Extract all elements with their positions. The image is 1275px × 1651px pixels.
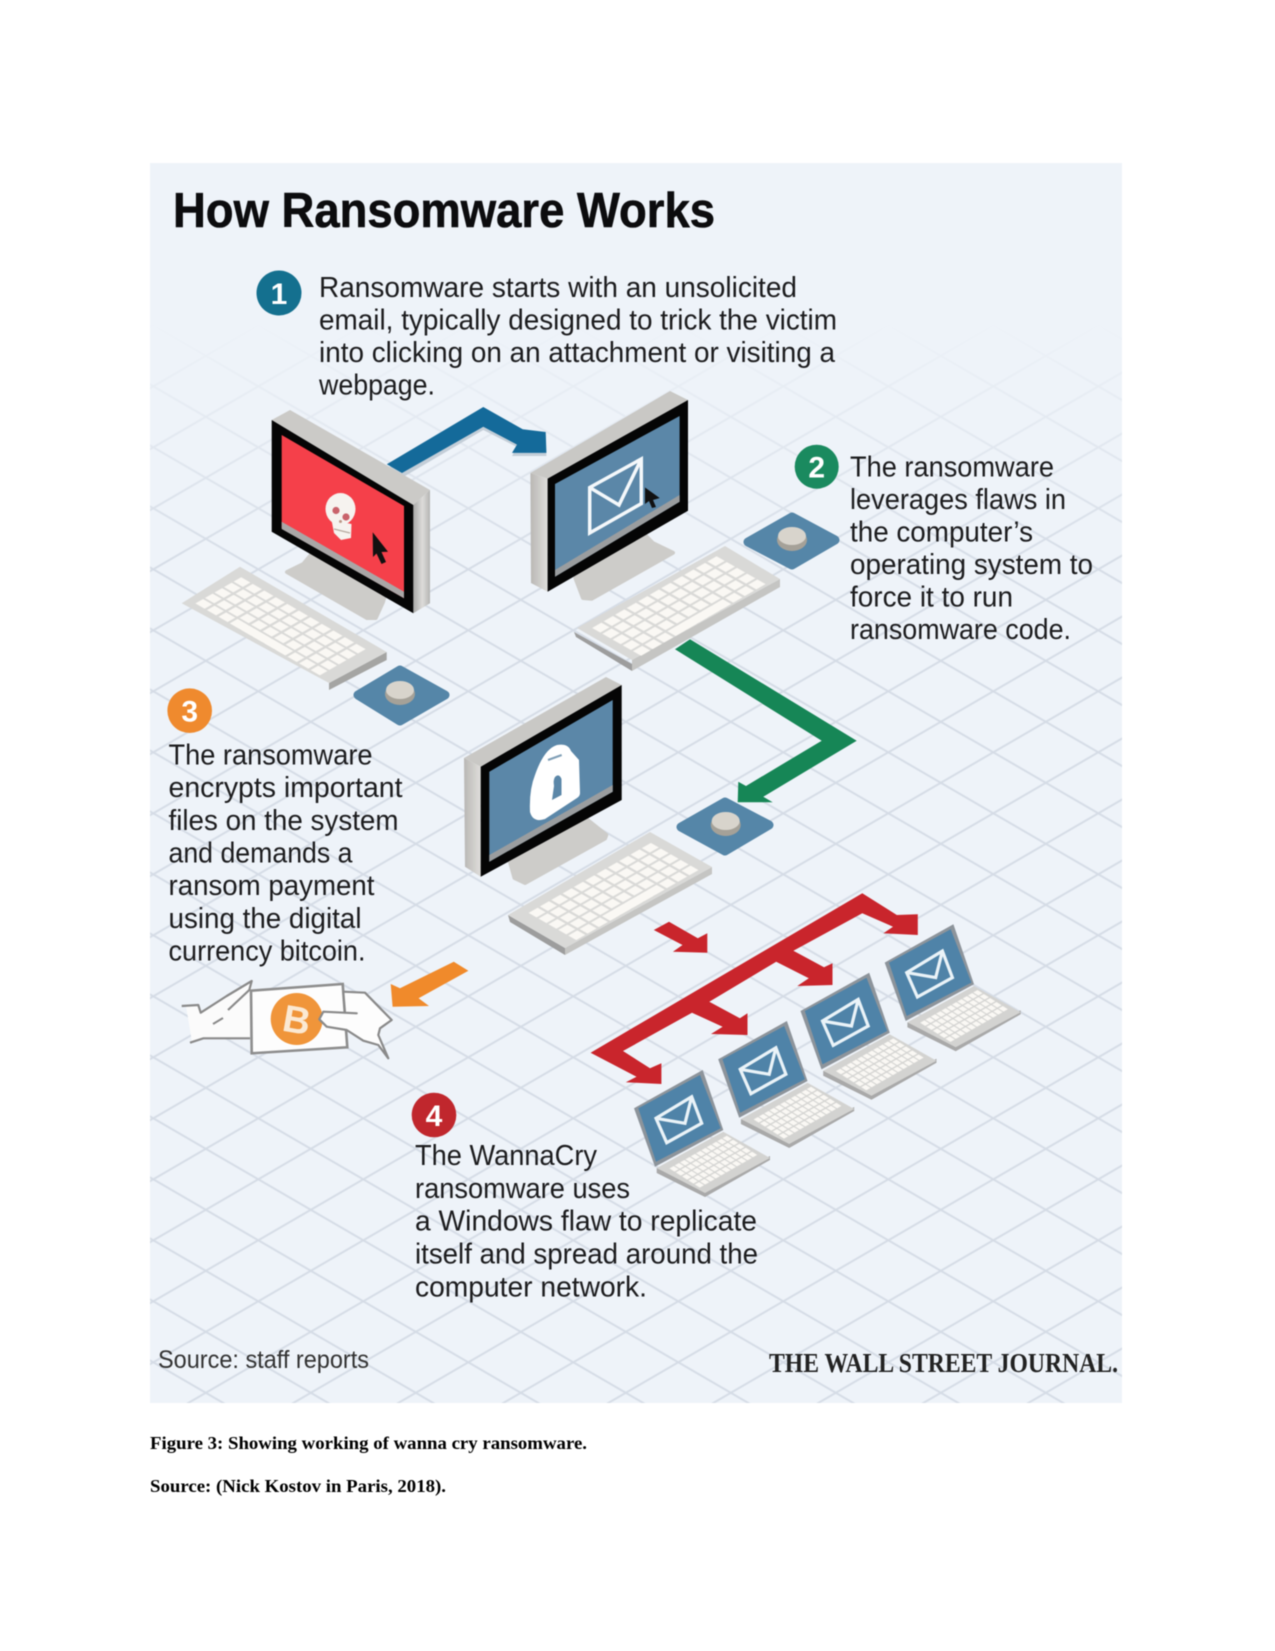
mouse pad 3 [681,802,769,851]
right hand [319,992,392,1058]
step 1 badge: 1 [271,278,287,311]
laptop 3 [800,973,936,1100]
step 1 text: webpage. [318,370,435,402]
keyboard 1 [182,567,387,690]
step 3 text: ransom payment [168,870,374,902]
step 2 text: operating system to [850,549,1093,581]
step 1 text: email, typically designed to trick the victim [319,304,837,336]
step 3 text [168,740,402,968]
arrow: orange toward bitcoin payment [391,962,468,1007]
source note: Source: staff reports [158,1346,369,1374]
step 2 text: the computer’s [850,516,1033,548]
step 2 text: leverages flaws in [850,484,1066,516]
step 2 badge [795,445,839,489]
step 3 text: files on the system [168,805,398,837]
step 1 text [318,272,837,402]
icon: hands exchanging bitcoin note [182,981,392,1058]
step 2 badge: 2 [808,452,825,484]
arrow: red branching to laptops [591,893,918,1084]
step 3 text: encrypts important [168,772,402,804]
mouse pad 1 [358,670,445,721]
step 3 badge [167,688,212,733]
step 3 text: currency bitcoin. [168,936,366,968]
monitor 2: envelope screen [530,391,688,599]
arrow: green from keyboard 2 to mouse pad 3 [675,639,857,802]
keyboard 3 [508,832,712,955]
figure caption: Figure 3: Showing working of wanna cry ransomware. [150,1433,587,1453]
panel: background with isometric grid [150,163,1122,1403]
step 4 text: ransomware uses [415,1173,630,1205]
publisher credit: THE WALL STREET JOURNAL. [769,1348,1118,1378]
step 2 text: force it to run [850,582,1013,614]
title: How Ransomware Works [173,184,715,238]
step 4 badge: 4 [426,1100,443,1133]
step 3 badge: 3 [181,696,198,728]
step 3 text: and demands a [168,838,353,870]
step 2 text: The ransomware [850,452,1054,484]
step 2 text: ransomware code. [850,614,1071,646]
step 3 text: The ransomware [168,740,372,772]
step 4 text [415,1140,758,1304]
step 1 text: Ransomware starts with an unsolicited [319,272,797,304]
icon: skull [326,493,356,540]
step 4 text: computer network. [415,1272,647,1304]
arrow: small red from keyboard 3 [654,922,707,953]
bitcoin coin: B [279,998,314,1044]
arrow: blue from monitor 1 to monitor 2 [387,407,546,476]
step 4 text: itself and spread around the [415,1238,758,1270]
step 1 text: into clicking on an attachment or visiting a [319,337,836,369]
icon: envelope [590,459,641,533]
mouse pad 2 [748,517,835,565]
monitor 3: lock screen [464,677,622,883]
laptop 1 [634,1070,770,1197]
banknote [251,984,347,1053]
monitor 1: red skull screen [272,410,430,618]
bitcoin coin [271,993,323,1045]
step 4 badge [412,1093,456,1137]
step 4 text: a Windows flaw to replicate [415,1206,757,1238]
laptop 4 [885,924,1021,1051]
left hand [182,981,252,1043]
keyboard 2 [574,546,780,671]
step 3 text: using the digital [168,903,362,935]
step 1 badge [256,270,302,316]
step 2 text [850,452,1093,646]
icon: cursor [645,488,660,508]
icon: cursor [373,532,388,564]
laptop 2 [718,1021,854,1148]
icon: padlock [530,745,580,820]
figure source: Source: (Nick Kostov in Paris, 2018). [150,1476,446,1497]
step 4 text: The WannaCry [415,1140,597,1172]
